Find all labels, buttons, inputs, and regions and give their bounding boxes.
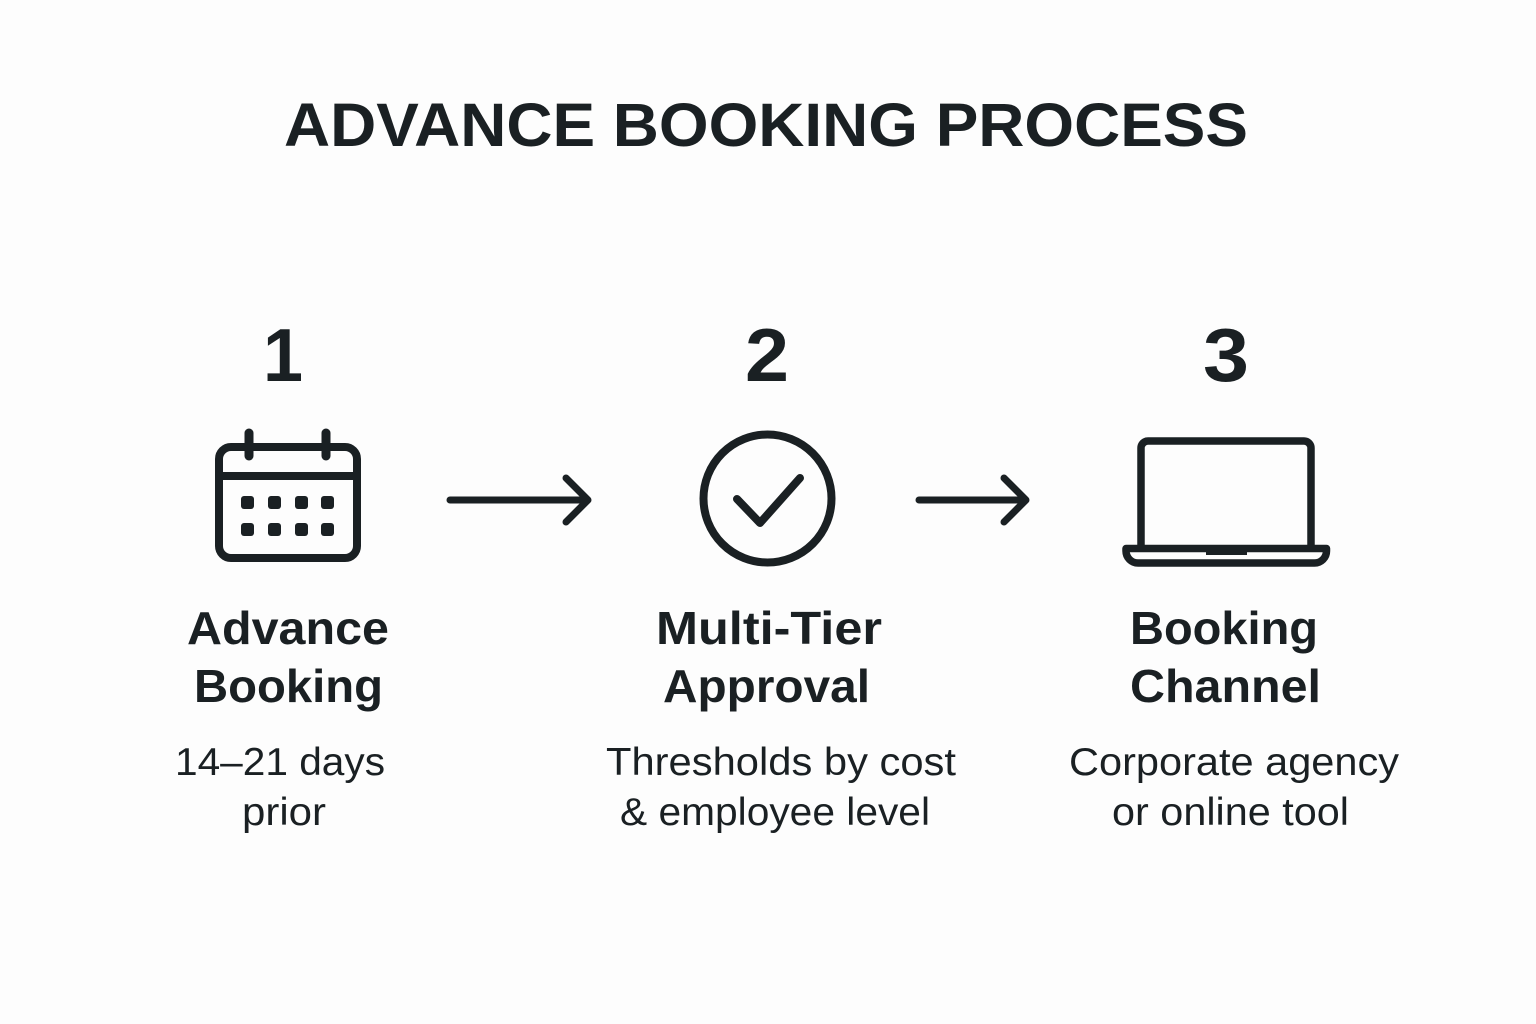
- step 2 description: [606, 741, 956, 834]
- step 2: multi-tier approval: [606, 313, 956, 834]
- step 2 description: Thresholds by cost: [606, 741, 956, 784]
- step 1 heading: [187, 602, 389, 712]
- step 1 number: 1: [263, 313, 303, 397]
- step 3 heading: Channel: [1130, 660, 1321, 712]
- step 3 description: Corporate agency: [1069, 741, 1400, 784]
- step 1 heading: Booking: [194, 660, 383, 712]
- step 2 description: & employee level: [620, 791, 930, 834]
- step 3 heading: [1130, 602, 1321, 712]
- step 2 number: 2: [745, 313, 789, 397]
- title: ADVANCE BOOKING PROCESS: [284, 91, 1248, 159]
- step 2 heading: Approval: [663, 660, 870, 712]
- icon: calendar: [219, 433, 357, 558]
- step 3 description: [1069, 741, 1400, 834]
- step 3 number: 3: [1203, 313, 1249, 397]
- step 2 heading: Multi-Tier: [656, 602, 882, 654]
- arrow: step 1 to step 2: [450, 478, 588, 522]
- step 1 description: [175, 741, 385, 834]
- icon: check circle: [704, 434, 832, 562]
- step 1: advance booking: [175, 313, 389, 834]
- step 1 heading: Advance: [187, 602, 389, 654]
- step 3: booking channel: [1069, 313, 1400, 834]
- icon: laptop: [1126, 441, 1326, 563]
- arrow: step 2 to step 3: [919, 478, 1026, 522]
- step 3 description: or online tool: [1112, 791, 1349, 834]
- step 3 heading: Booking: [1130, 602, 1318, 654]
- step 1 description: prior: [242, 791, 326, 834]
- step 1 description: 14–21 days: [175, 741, 385, 784]
- step 2 heading: [656, 602, 882, 712]
